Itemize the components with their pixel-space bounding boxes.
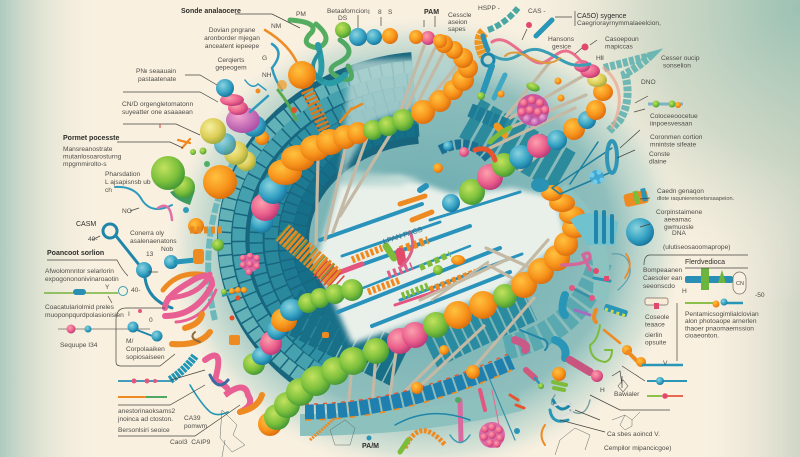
label: Bompeaanen: Caesoler ean (643, 275, 683, 282)
label: Coacatulariolmid: Coacatulariolmid preles (45, 304, 114, 311)
right panel rules and lower right bars (560, 255, 748, 432)
label: Pentamicsogimlialclovian: cioaeonton. (685, 333, 719, 340)
label: PN9 seaauain: P№ seaauain (136, 68, 176, 75)
label: Coronmen cortion: mnintste sifeate (650, 142, 697, 148)
label: Pormet description: Mansreanostrate (63, 146, 112, 153)
label: short tags top: Betaaforncion (327, 8, 368, 15)
label: Bompeaanen: seeonscdo (643, 283, 675, 290)
small pink cluster left (240, 253, 260, 275)
lower right hooks and probes (310, 253, 646, 452)
left bead chain (216, 79, 269, 145)
label: Cerqierts: gepeogem (215, 64, 247, 72)
label: Pentamicsogimlialclovian: thaoer pnaomaemssion (685, 325, 754, 332)
lower beaded blue band (305, 345, 512, 420)
label: anestorinaoksams2: anestorinaoksams2 (118, 408, 175, 415)
label: Afwolomnntor: Afwolomnntor selarlorin (45, 268, 114, 275)
label: right panel tags: H (600, 387, 605, 394)
left icon: bracket (116, 308, 175, 366)
label: left short tags: I (128, 311, 130, 318)
teal translucent ribbon at top right (604, 56, 650, 132)
right top icons (522, 11, 597, 54)
label: Hansons: Hansons (548, 36, 574, 43)
right strand with beads (442, 60, 613, 212)
label: PN9 seaauain: pastaatenate (138, 76, 176, 83)
label: DNO: DNO (641, 79, 656, 86)
label: Pormet description: mutanlosoarosturng (63, 154, 122, 160)
label: short tags top: NH (262, 72, 272, 79)
label: PAM top: PAM (424, 9, 439, 16)
label: Bawialer: Bawialer (614, 391, 640, 398)
label: Coseole: teaace (645, 322, 665, 328)
teal wash behind the ring (163, 13, 687, 457)
label: Caedn genaqon: Caedn genaqon (657, 188, 704, 195)
label: CA39: pomwm (184, 423, 208, 430)
label: Pentamicsogimlialclovian: Pentamicsogimlialclovian (685, 311, 759, 318)
label: CN/D orgengletomatonn: suyeatter one asaaaean (122, 109, 193, 116)
label: HSPP and CAS: HSPP - (478, 5, 500, 12)
label: Cesser oucip: sonselion (663, 62, 691, 70)
left icon: coloured strips (118, 378, 172, 397)
label: right panel tags: V (663, 360, 668, 367)
label: CN/D orgengletomatonn: CN/D orgengletomatonn (122, 101, 193, 108)
pink cluster bottom (479, 422, 505, 448)
label: Pharsdation: L ajsapisnsb ub (105, 179, 151, 186)
label: Corpolaaiken: M/ (126, 338, 133, 345)
label: Cesscle: sapes (448, 26, 466, 33)
woven teal protein ring (208, 67, 602, 425)
label: Bersonlsiri seoice: Bersonlsiri seoice (118, 427, 170, 434)
label: left short tags: Nob (161, 246, 173, 253)
label: left short tags: CASM (76, 221, 96, 228)
label: Corpolaaiken: sopiosaiseen (126, 354, 165, 361)
label: Sequupe I34: Sequupe I34 (60, 342, 98, 349)
label: Corpinstaimene: aeeamac (664, 216, 692, 224)
label: left short tags: 13 (146, 251, 154, 258)
label: HII: HⅡ (596, 55, 604, 62)
orange sphere with spring (245, 30, 362, 130)
label: cierlin: opsuite (645, 340, 667, 346)
label: Casoepoun: Casoepoun (605, 36, 639, 43)
label: HSPP and CAS: CAS - (528, 8, 546, 15)
label: description top left: Dovian pngrane (209, 27, 255, 34)
label: Conste: Conste (649, 151, 670, 158)
central twisted clusters (440, 110, 510, 160)
leader lines (47, 14, 650, 436)
upper-left strand with beads (251, 22, 478, 233)
label: short tags top: PM (296, 11, 306, 18)
label: Pentamicsogimlialclovian: alon photoaope arnerlen (685, 318, 757, 325)
pale central panel (316, 176, 566, 344)
label: short tags top: 8 (378, 9, 382, 16)
label: right panel tags: H (682, 288, 687, 295)
label: Cesscle: aseion (448, 19, 468, 26)
upper pale fill between strands (340, 58, 458, 186)
label: Coronmen cortion: Coronmen cortion (650, 134, 702, 141)
blue ring connector (103, 224, 225, 308)
label: Pharsdation: Pharsdation (105, 171, 140, 178)
label: short tags top (262, 8, 393, 79)
label: short tags top: NM (271, 23, 281, 30)
label: cierlin: cierlin (645, 332, 662, 339)
right panel diagram (685, 268, 746, 308)
label: Ca sbes aoincd V: Ca sbes aoincd V. (607, 431, 660, 438)
label: Bompeaanen: Bompeaanen (643, 267, 682, 274)
right cone and sphere (552, 141, 654, 246)
central blue rods with coloured clusters (320, 163, 522, 326)
label: anestorinaoksams2: jnoinca ad ctoston. (117, 416, 173, 423)
label: CA39: CA39 (184, 415, 200, 422)
label: Coloceeoocetue: iinpoesvesaan (650, 120, 692, 128)
pink cluster top (517, 94, 549, 126)
right small beaded line (634, 96, 683, 112)
label: Corpinstaimene: DNA (672, 230, 687, 237)
green ribbon coil top (290, 20, 352, 83)
green and orange mid strand (243, 232, 363, 375)
label: Afwolomnntor: expogonononivinaroaotin (45, 276, 119, 283)
label: Conerra oly: asalenaenatons (130, 238, 177, 245)
label: left short tags (76, 208, 173, 324)
label: Hansons: gesice (552, 44, 571, 50)
blue curl with knot near label (115, 187, 204, 234)
label: Cempilor mipancicgoe: Cempilor mipancicgoe) (604, 445, 671, 452)
label: left short tags: 40- (88, 236, 98, 243)
label: Cesscle: Cesscle (448, 12, 471, 19)
label: central LPAN PACS: LPAN PACS (382, 225, 424, 246)
label: Poancoot sorlion: Poancoot sorlion (47, 250, 104, 257)
label: Corpinstaimene: Corpinstaimene (656, 209, 702, 216)
lower main strand with large beads (258, 178, 588, 436)
label: short tags top: DS (338, 15, 348, 22)
yellow coil beads (178, 118, 256, 171)
label: Cesser oucip: Cesser oucip (661, 55, 699, 62)
label: Pormet pocesste: Pormet pocesste (63, 135, 120, 142)
label: Cerqierts: Cerqierts (218, 57, 244, 64)
label: short tags top: G (262, 55, 267, 62)
label: Coseole: Coseole (645, 314, 669, 321)
label: description top left: aronborder mjegan (204, 35, 260, 42)
label: Sonde analaocere: Sonde analaocere (181, 8, 241, 15)
lower-left helix (170, 356, 262, 415)
label: short tags top: S (388, 9, 393, 16)
label: CaoI3 CAIP9: CaoI3 CAIP9 (170, 439, 211, 446)
label: Corpolaaiken: Corpolaaiken (126, 346, 165, 353)
label: Casoepoun: mapiccas (605, 44, 634, 50)
small beads string (221, 287, 329, 345)
label: right panel tags (600, 281, 765, 394)
left icon: pink and blue beads line (58, 309, 162, 342)
faint chemical structure bottom (220, 410, 640, 457)
label: left short tags: Y (105, 284, 110, 291)
label: Conste: dlaine (649, 158, 667, 166)
label: Pharsdation: ch (105, 187, 112, 194)
top helix and orange stack (477, 8, 590, 102)
label: Corpinstaimene: gwmuosle (664, 224, 694, 231)
label: short tags top: I (368, 9, 370, 16)
label: CA5O sygence: CA5O) sygence (577, 13, 627, 20)
label: PA/M bottom: PA/M (362, 443, 379, 450)
large green and orange spheres (151, 156, 237, 213)
label: Caegriorayrnymmalaeelcion: Caegriorayrnymmalaeelcion, (577, 20, 661, 27)
label: left short tags: NO (122, 208, 132, 215)
label: description top left: anceatent iepeepe (205, 43, 259, 50)
gray struts between strands (316, 46, 590, 410)
label: Conerra oly: Conerra oly (130, 230, 164, 237)
label: ulutiseosaoomaprope: (ulutiseosaoomaprope) (663, 244, 730, 251)
label: right panel tags: -50 (755, 292, 765, 299)
label: left short tags: 0 (149, 317, 153, 324)
left icon: green line with beads (44, 286, 128, 296)
label: Caedn genaqon: dlote raqunierenoetsrsaapeion. (657, 196, 735, 202)
label: Coloceeoocetue: Coloceeoocetue (650, 113, 698, 120)
label: Pormet description: mpgmmirolto-s (63, 161, 107, 168)
label: left short tags: 40- (131, 287, 141, 294)
label: Coacatulariolmid: muoponpqurdpolasionisien (45, 312, 124, 319)
label: Flerdvedioca: Flerdvedioca (685, 259, 725, 266)
label: right panel tags: CN (736, 281, 744, 287)
pink ribbon coil (163, 274, 216, 344)
orange coloured barrel (623, 188, 649, 207)
